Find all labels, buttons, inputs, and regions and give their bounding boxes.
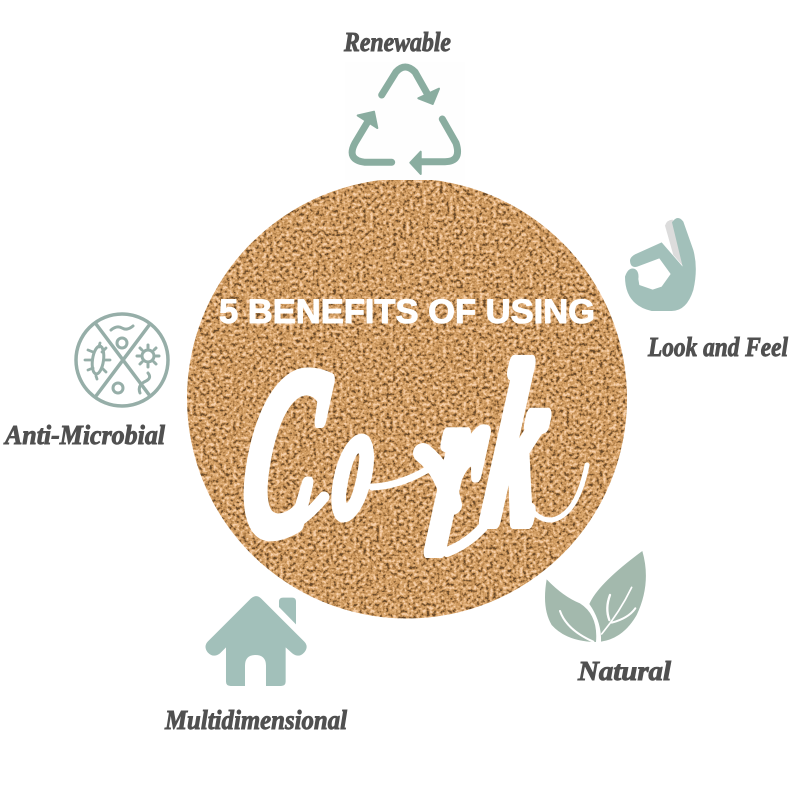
subtitle: 5 benefits of using: 5 BENEFITS OF USING <box>219 293 595 331</box>
icon: recycle arrows <box>345 62 465 180</box>
icon: house <box>205 596 307 686</box>
title: Cork: r <box>417 328 502 605</box>
label: Multidimensional: Multidimensional <box>164 705 347 735</box>
title: Cork: o <box>325 374 386 551</box>
title: Cork: k <box>475 321 561 570</box>
label: Renewable: Renewable <box>343 27 451 57</box>
label: Natural: Natural <box>577 656 672 686</box>
cork disc <box>187 178 627 619</box>
title: Cork <box>227 321 587 605</box>
icon: leaves <box>545 551 646 642</box>
label: Anti-Microbial: Anti-Microbial <box>3 420 165 450</box>
title: Cork: C <box>230 322 340 582</box>
icon: anti-microbial circle <box>76 314 168 406</box>
icon: OK hand <box>625 218 696 311</box>
